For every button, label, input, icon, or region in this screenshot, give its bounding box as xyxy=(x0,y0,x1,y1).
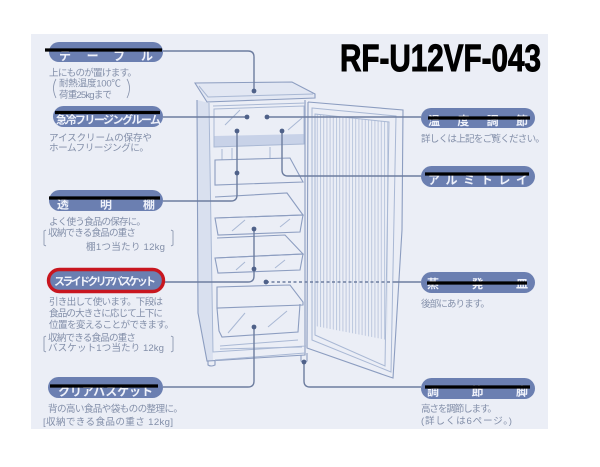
label: adjustable foot: 調 節 脚 xyxy=(427,384,528,398)
title: RF-U12VF-043 xyxy=(340,38,541,80)
text: table description: 荷重25kgまで xyxy=(59,89,112,101)
label: slide clear basket (highlighted) xyxy=(48,270,164,292)
text: table description xyxy=(49,67,137,101)
label: slide clear basket (highlighted): スライドクリアバスケット xyxy=(54,275,156,288)
text: clear basket description xyxy=(43,403,183,428)
panel: diagram background xyxy=(31,34,548,429)
illustration: open freezer xyxy=(195,82,403,378)
shelf 2 with basket xyxy=(215,193,303,235)
text: slide basket description: 食品の大きさに応じて上下に xyxy=(49,308,163,320)
text: quick-freeze description: ホームフリージングに。 xyxy=(49,142,149,154)
label: table: テーブル xyxy=(59,48,153,63)
label: evaporation tray xyxy=(421,272,535,293)
adjustable foot xyxy=(301,353,307,362)
leader: adjustable foot xyxy=(302,360,421,387)
text: table description: 耐熱温度100℃ xyxy=(59,78,121,90)
freezer body xyxy=(197,100,306,366)
label: clear basket: クリアバスケット xyxy=(58,384,153,398)
text: clear basket description: 背の高い食品や袋ものの整理に。 xyxy=(48,403,183,415)
leader: temperature control xyxy=(265,115,421,119)
leader: aluminium tray xyxy=(280,129,421,176)
leader: slide clear basket xyxy=(165,227,256,282)
shelf 3 with basket xyxy=(215,235,303,273)
label: temperature control: 温 度 調 節 xyxy=(428,113,528,128)
label: quick-freeze room xyxy=(53,106,163,127)
text: quick-freeze description: アイスクリームの保存や xyxy=(49,132,152,144)
text: adjustable foot description: (詳しくは6ページ。) xyxy=(421,415,512,427)
text: slide basket description xyxy=(44,296,174,354)
label: quick-freeze room: 急冷フリージングルーム xyxy=(56,112,161,126)
slide clear basket xyxy=(217,285,303,349)
label: aluminium tray: アルミトレイ xyxy=(428,173,528,187)
text: clear shelf description xyxy=(44,216,173,253)
top table xyxy=(195,82,315,102)
text: clear shelf description: よく使う食品の保存に。 xyxy=(49,216,146,228)
label: aluminium tray xyxy=(421,166,535,187)
text: adjustable foot description xyxy=(421,403,512,427)
text: temperature description: 詳しくは上記をご覧ください。 xyxy=(421,133,545,145)
text: adjustable foot description: 高さを調節します。 xyxy=(421,403,497,415)
text: slide basket description: 引き出して使います。下段は xyxy=(49,296,163,308)
label: adjustable foot xyxy=(421,378,535,399)
leader: evaporation tray xyxy=(264,280,421,284)
text: quick-freeze description xyxy=(49,132,152,154)
leader: clear basket xyxy=(163,325,256,387)
label: clear shelf: 透 明 棚 xyxy=(57,196,155,212)
text: slide basket description: 位置を変えることができます。 xyxy=(49,319,174,331)
leader: quick-freeze room xyxy=(163,115,249,119)
text: clear shelf description: 棚1つ当たり 12kg xyxy=(86,241,165,253)
label: table xyxy=(45,42,163,63)
shelf 1 xyxy=(215,158,303,185)
text: table description: 上にものが置けます。 xyxy=(49,67,137,79)
text: evaporation tray description: 後部にあります。 xyxy=(421,298,490,310)
text: slide basket description: 収納できる食品の重さ xyxy=(48,332,136,344)
text: clear basket description: [収納できる食品の重さ 12kg] xyxy=(43,416,173,428)
text: clear shelf description: 収納できる食品の重さ xyxy=(48,227,136,239)
open door xyxy=(307,102,403,378)
leader: clear shelf xyxy=(163,129,239,201)
leader: table xyxy=(163,51,256,93)
label: clear shelf xyxy=(49,190,163,212)
label: clear basket xyxy=(48,377,163,398)
label: evaporation tray: 蒸 発 皿 xyxy=(427,276,528,291)
text: slide basket description: バスケット1つ当たり 12kg xyxy=(48,342,164,354)
label: temperature control xyxy=(421,108,535,128)
